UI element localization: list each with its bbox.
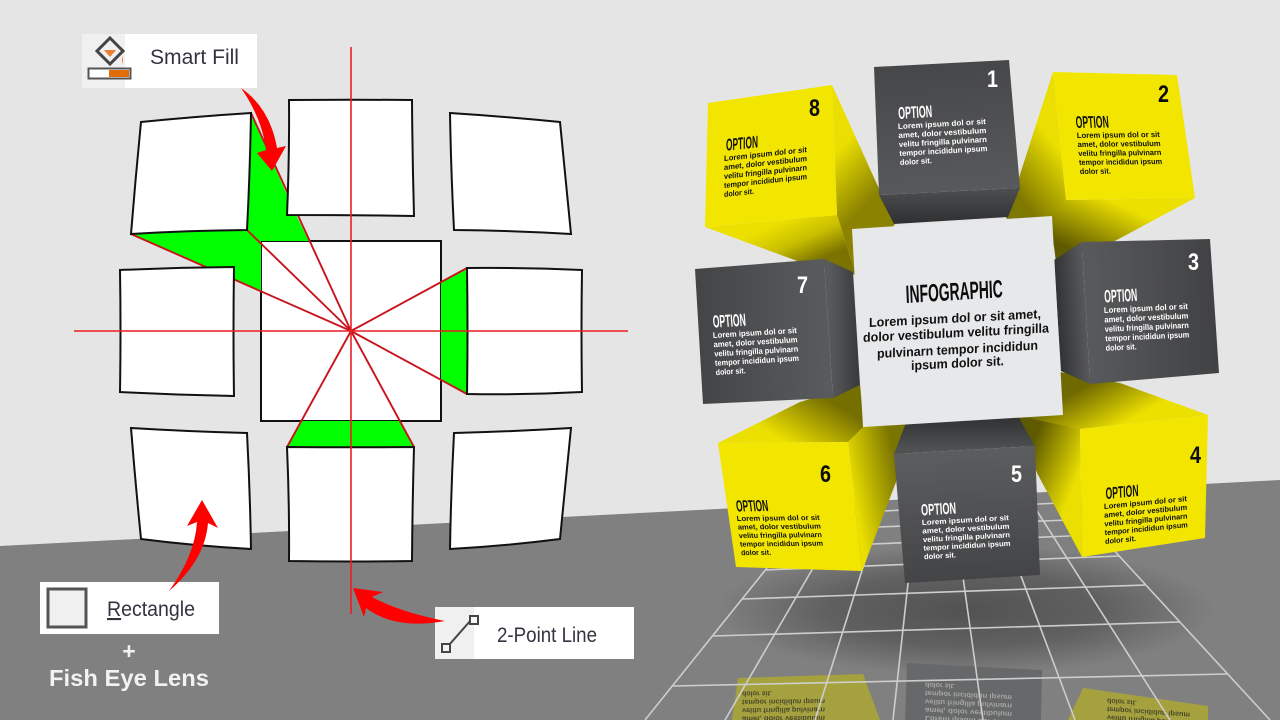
cube 7 [695, 259, 860, 404]
text block 2: amet, dolor vestibulum [1077, 139, 1161, 149]
text block 3: OPTION [1104, 285, 1138, 307]
reflections of cubes: dolor sit. [1107, 697, 1137, 707]
center square [261, 241, 441, 421]
text block 3: dolor sit. [1105, 342, 1137, 353]
cube 6 (yellow) sides [718, 384, 906, 571]
radial construction lines [131, 113, 467, 447]
text block 3: amet, dolor vestibulum [1104, 311, 1189, 324]
reflections of cubes [732, 663, 1208, 720]
floor shadow [715, 545, 1215, 675]
text block 2: velitu fringilla pulvinarn [1078, 148, 1162, 158]
text block 8 [724, 127, 807, 199]
icon: rectangle [48, 589, 86, 627]
text block 5: tempor incididun ipsum [923, 539, 1011, 553]
text block 1: OPTION [898, 102, 933, 123]
fish eye cards [120, 100, 582, 562]
text block 7: dolor sit. [715, 366, 746, 377]
cube 2 [1053, 72, 1195, 200]
text block 6 [734, 496, 825, 557]
text block 6: velitu fringilla pulvinarn [738, 530, 823, 540]
cube 5 [894, 416, 1040, 583]
number 1: 1 [987, 66, 998, 93]
text block 7: tempor incididun ipsum [715, 354, 799, 368]
cube 8 [705, 85, 837, 227]
text block 7: Lorem ipsum dol or sit [712, 326, 798, 340]
text block 8: OPTION [726, 132, 758, 155]
text block 2: OPTION [1075, 113, 1110, 132]
label: 2-point line [435, 607, 634, 659]
plus sign: + [122, 638, 136, 664]
text block 1: Lorem ipsum dol or sit [898, 117, 987, 131]
reflections of cubes: velitu fringilla pulvinarn [742, 705, 825, 715]
cube 4 [1080, 415, 1208, 557]
cube 4 (yellow) sides [1018, 372, 1208, 557]
text block 6: dolor sit. [740, 548, 772, 557]
number 8: 8 [809, 95, 820, 122]
text block 2: tempor incididun ipsum [1079, 157, 1162, 167]
fish eye lens label: Fish Eye Lens [49, 665, 209, 691]
number 4: 4 [1190, 442, 1202, 469]
text block 1: amet, dolor vestibulum [898, 126, 987, 140]
reflections of cubes: tempor incididun ipsum [742, 697, 825, 707]
number 7: 7 [797, 272, 808, 299]
cube 1 [874, 60, 1020, 224]
text block 4 [1103, 477, 1189, 546]
text block 8: tempor incididun ipsum [724, 172, 807, 190]
text block 1: dolor sit. [900, 156, 932, 167]
text block 5: OPTION [920, 499, 957, 519]
central description: pulvinarn tempor incididun [877, 338, 1038, 361]
label: rectangle: Rectangle [107, 598, 195, 621]
text block 5: Lorem ipsum dol or sit [922, 513, 1010, 527]
text block 4: dolor sit. [1105, 534, 1136, 546]
text block 5: velitu fringilla pulvinarn [923, 530, 1011, 544]
cube 8 (yellow) sides [705, 85, 895, 275]
reflections of cubes: dolor sit. [925, 681, 955, 691]
text block 6: amet, dolor vestibulum [737, 522, 822, 531]
text block 3: Lorem ipsum dol or sit [1104, 302, 1188, 315]
text block 4: tempor incididun ipsum [1105, 520, 1188, 537]
reflections of cubes: dolor sit. [742, 689, 772, 698]
reflections of cubes: amet, dolor vestibulum [925, 706, 1012, 719]
central description: ipsum dolor sit. [911, 353, 1004, 373]
text block 2: Lorem ipsum dol or sit [1076, 130, 1161, 140]
label: 2-point line: 2-Point Line [497, 624, 597, 647]
text block 7: amet, dolor vestibulum [713, 335, 798, 349]
text block 6: Lorem ipsum dol or sit [736, 513, 821, 523]
central description: dolor vestibulum velitu fringilla [863, 320, 1050, 345]
central description: Lorem ipsum dol or sit amet, [869, 306, 1041, 330]
text block 7: OPTION [712, 309, 747, 332]
label: rectangle [40, 582, 219, 634]
text block 5 [920, 496, 1012, 561]
text block 3 [1103, 282, 1190, 353]
infographic title: INFOGRAPHIC [905, 275, 1003, 309]
text block 6: OPTION [735, 497, 769, 515]
text block 1: tempor incididun ipsum [899, 144, 988, 158]
text block 2: dolor sit. [1079, 167, 1111, 176]
text block 7: velitu fringilla pulvinarn [714, 344, 799, 359]
floor grid [645, 500, 1270, 720]
reflections of cubes: tempor incididun ipsum [1107, 705, 1190, 719]
text block 6: tempor incididun ipsum [739, 539, 824, 549]
text block 1: velitu fringilla pulvinarn [899, 135, 987, 149]
text block 8: velitu fringilla pulvinarn [724, 163, 807, 181]
icon: 2-point line [442, 616, 478, 652]
label: smart fill [82, 34, 257, 88]
arrow: to line [353, 588, 445, 624]
cube 6 [718, 442, 862, 571]
smart fill green regions [131, 113, 467, 447]
number 2: 2 [1158, 81, 1169, 108]
reflections of cubes: tempor incididun ipsum [925, 689, 1012, 702]
text block 2 [1075, 112, 1164, 176]
central description [863, 306, 1050, 373]
arrow: to smart fill [241, 88, 286, 171]
text block 1 [897, 99, 989, 167]
label: smart fill: Smart Fill [150, 46, 239, 69]
arrow: to rectangle card [169, 500, 218, 591]
text block 4: Lorem ipsum dol or sit [1104, 494, 1187, 511]
reflections of cubes: velitu fringilla pulvinarn [925, 697, 1012, 710]
text block 3: tempor incididun ipsum [1105, 330, 1189, 343]
number 6: 6 [820, 461, 831, 488]
text block 5: dolor sit. [924, 551, 956, 561]
text block 8: amet, dolor vestibulum [724, 154, 807, 172]
text block 8: Lorem ipsum dol or sit [724, 145, 807, 163]
text block 4: amet, dolor vestibulum [1104, 503, 1187, 520]
text block 8: dolor sit. [724, 187, 754, 199]
axis lines [74, 47, 628, 614]
text block 4: velitu fringilla pulvinarn [1104, 512, 1188, 528]
icon: smart fill [88, 38, 130, 78]
number 3: 3 [1188, 249, 1199, 276]
cube 2 (yellow) sides [1006, 72, 1195, 262]
central panel [852, 216, 1063, 427]
text block 3: velitu fringilla pulvinarn [1105, 321, 1189, 334]
cube 3 [1054, 239, 1219, 384]
number 5: 5 [1011, 461, 1022, 488]
text block 5: amet, dolor vestibulum [922, 522, 1010, 535]
floor [0, 480, 1280, 720]
text block 4: OPTION [1105, 481, 1139, 503]
text block 7 [711, 306, 800, 377]
